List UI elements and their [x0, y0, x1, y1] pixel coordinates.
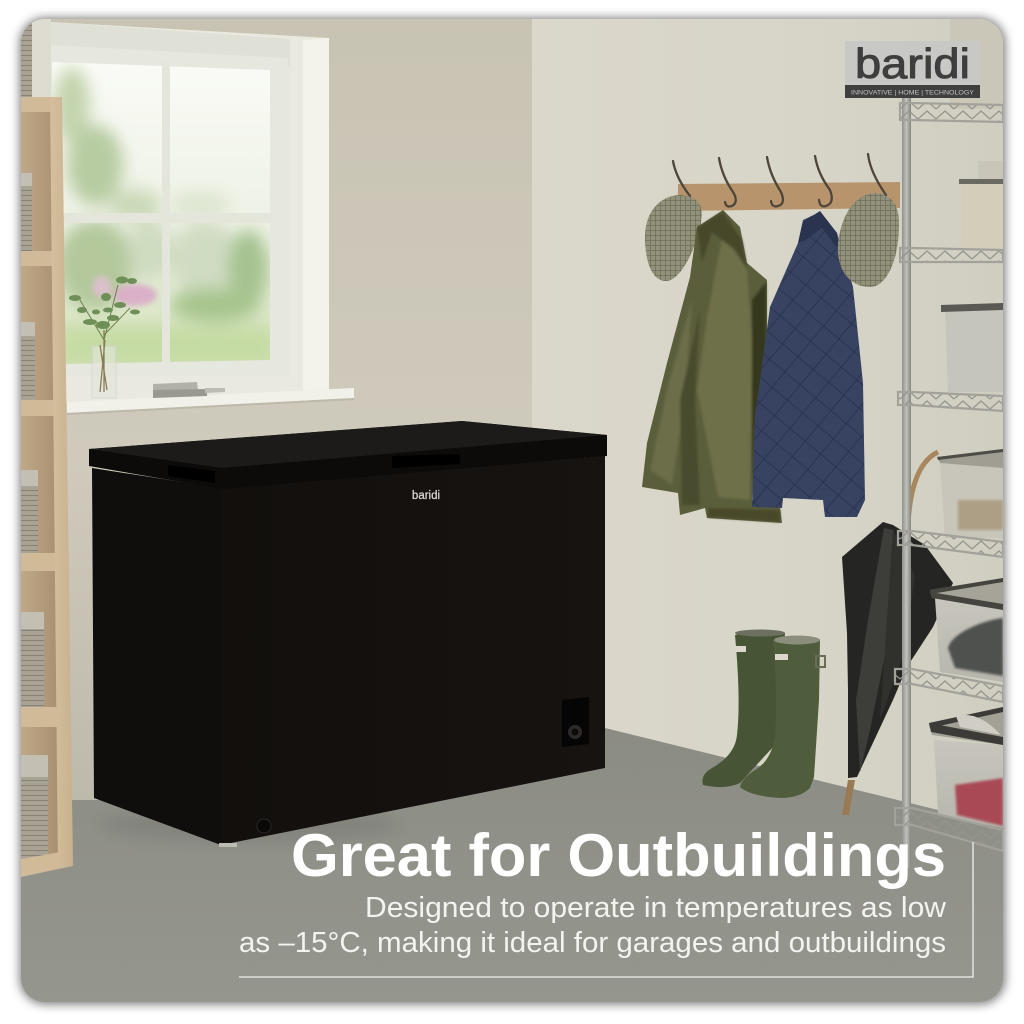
description line 2: as –15°C, making it ideal for garages and outbuildings [239, 927, 946, 959]
window [32, 19, 354, 415]
window mullions [52, 62, 272, 368]
description line 1: Designed to operate in temperatures as low [365, 892, 947, 924]
logo tagline: INNOVATIVE | HOME | TECHNOLOGY [851, 90, 974, 96]
plant in vase [69, 276, 140, 398]
top bin [959, 161, 1003, 248]
back walls [21, 19, 1003, 849]
storage bins [929, 161, 1003, 828]
chest freezer [89, 421, 607, 847]
heading: Great for Outbuildings [291, 822, 946, 889]
freezer lid [89, 421, 607, 489]
freezer front [221, 456, 605, 845]
wellington boots [702, 630, 825, 798]
third bin [937, 449, 1003, 538]
books on sill [153, 382, 225, 398]
fifth bin [929, 707, 1003, 828]
wire shelving unit [895, 98, 1003, 868]
text frame [239, 842, 973, 977]
freezer side [92, 468, 221, 845]
logo [845, 40, 980, 98]
left flat cap [645, 195, 702, 281]
logo wordmark: baridi [855, 40, 970, 87]
olive coat [642, 210, 782, 523]
floor [21, 700, 1003, 1002]
coat rail with hooks [673, 154, 900, 211]
control panel [562, 697, 589, 747]
freezer brand: baridi [412, 490, 440, 502]
window sill [67, 388, 354, 413]
right flat cap [838, 193, 899, 287]
second bin [941, 303, 1003, 392]
umbrella [842, 452, 953, 815]
window glass and garden [52, 62, 270, 364]
navy quilted jacket [752, 211, 865, 517]
bookshelf with baskets [21, 19, 73, 877]
fourth bin [930, 578, 1003, 682]
